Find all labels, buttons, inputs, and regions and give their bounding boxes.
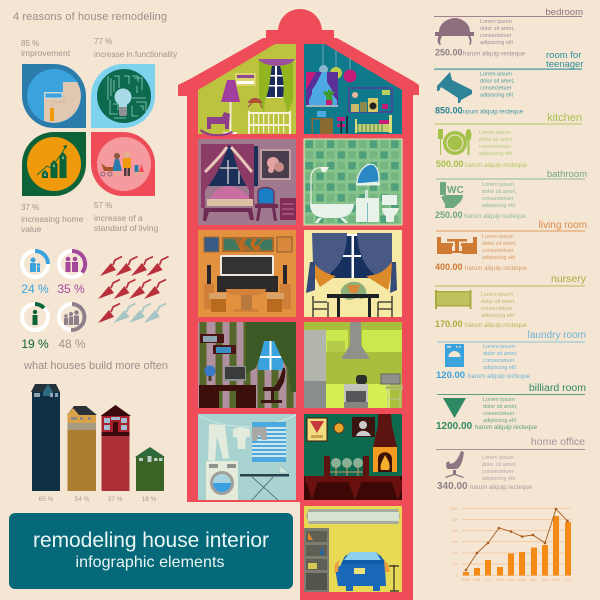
- bathroom mirror: [356, 164, 380, 186]
- sideboard: [217, 276, 278, 292]
- icon: office chair: [445, 451, 464, 478]
- bedroom chair: [255, 188, 278, 221]
- x axis labels: 2011: [530, 578, 537, 582]
- dining window: [330, 234, 380, 278]
- donut 19 percent: 19 %: [21, 337, 49, 351]
- room: kitchen: [304, 322, 402, 408]
- reason: improvement: 85 %: [21, 39, 39, 48]
- list: room for teenager: harum aliquip recteque: [461, 108, 524, 116]
- y axis labels: 300: [452, 540, 458, 544]
- list: laundry room: [436, 330, 586, 381]
- y axis labels: 1000: [450, 507, 458, 511]
- clothes line: [200, 415, 296, 426]
- room: bedroom: [198, 139, 296, 225]
- x axis labels: 2013: [552, 578, 560, 582]
- list: kitchen: kitchen: [547, 112, 582, 124]
- list: living room: living room: [539, 220, 587, 231]
- kitchen shelf: [327, 341, 345, 352]
- list: bedroom: dolor sit amet,: [480, 26, 515, 32]
- office desk: [199, 385, 256, 408]
- list: billiard room: billiard room: [529, 382, 586, 394]
- x axis labels: 2007: [484, 578, 492, 582]
- x axis labels: 2008: [496, 578, 503, 582]
- list: living room: Lorem ipsum: [482, 234, 514, 240]
- list: kitchen: [434, 112, 582, 169]
- list: kitchen: dolor sit amet,: [479, 137, 514, 143]
- office curtains: [246, 322, 296, 392]
- t-shirt: [233, 427, 250, 449]
- list: home office: dolor sit amet,: [482, 462, 517, 468]
- icon: toilet sign: [440, 182, 464, 208]
- list: billiard room: [436, 382, 586, 432]
- dining chairs: [313, 296, 392, 317]
- reason: home value: [21, 132, 86, 234]
- title banner: infographic elements: [76, 554, 224, 571]
- blue curtains: [312, 233, 392, 277]
- list: billiard room: adipiscing elit: [483, 418, 516, 424]
- trowel pictogram: [98, 256, 168, 323]
- list: laundry room: laundry room: [528, 330, 586, 341]
- icon: plate and cutlery: [438, 129, 472, 155]
- list: kitchen: consectetuer: [479, 144, 511, 150]
- bar house 65 percent: 65 %: [39, 496, 54, 503]
- chart: house bars: [31, 384, 165, 503]
- reason: functionality: [91, 37, 177, 128]
- y axis labels: 200: [452, 551, 458, 555]
- reason: home value: $: [62, 155, 65, 160]
- title banner: remodeling house interior: [33, 529, 269, 552]
- room: living room: [198, 230, 296, 317]
- shorts: [252, 427, 267, 441]
- list: room for teenager: teenager: [546, 59, 584, 70]
- bathtub: [310, 204, 354, 223]
- wall art: [204, 237, 292, 252]
- ironing board: [240, 465, 289, 500]
- list: bathroom: dolor sit amet,: [482, 189, 517, 195]
- y axis labels: 0: [456, 574, 458, 578]
- list: room for teenager: Lorem ipsum: [480, 72, 512, 78]
- list: home office: [436, 436, 585, 492]
- pot: [356, 375, 367, 384]
- reason: home value: increasing home: [21, 214, 84, 224]
- list: nursery: consectetuer: [481, 306, 513, 312]
- heading: 4 reasons: 4 reasons of house remodeling: [13, 11, 167, 23]
- jack stand: [389, 565, 399, 591]
- room: home office: [198, 322, 296, 408]
- vanity: [356, 190, 379, 222]
- striped towel: [252, 422, 286, 462]
- rocking horse: [200, 112, 233, 136]
- wall shelf: [235, 73, 256, 86]
- computer monitor: [224, 366, 246, 381]
- stove: [344, 384, 368, 408]
- toilet: [382, 195, 399, 222]
- room: billiard: [304, 414, 402, 500]
- crib: [248, 111, 291, 134]
- icon: toilet sign: WC: [447, 185, 464, 196]
- list: bedroom: bedroom: [546, 7, 583, 18]
- list: bathroom: harum aliquip recteque: [464, 213, 527, 220]
- chimney: [373, 414, 397, 447]
- panel: four reasons: [21, 37, 177, 234]
- list: billiard room: harum aliquip recteque: [475, 424, 538, 431]
- list: bedroom: harum aliquip recteque: [463, 50, 526, 58]
- floor lamp: [221, 80, 240, 134]
- list: nursery: nursery: [551, 273, 587, 285]
- reason: home value: $: [53, 163, 56, 168]
- framed poster: [307, 418, 327, 441]
- list: living room: adipiscing elit: [482, 255, 515, 261]
- list: kitchen: Lorem ipsum: [479, 130, 511, 136]
- icon: bed: [437, 72, 472, 103]
- list: living room: dolor sit amet,: [482, 241, 517, 247]
- list: bedroom: 250.00: [435, 48, 463, 58]
- list: room for teenager: 850.00: [435, 106, 463, 116]
- donut 35 percent: 35 %: [57, 282, 85, 296]
- x axis labels: 2006: [473, 578, 480, 582]
- list: kitchen: adipiscing elit: [479, 151, 512, 157]
- house outline: [178, 9, 419, 600]
- reason: standard of living: standard of living: [94, 223, 159, 233]
- list: bathroom: 250.00: [435, 210, 463, 220]
- icon: headboard: [435, 18, 474, 45]
- trend line: [465, 508, 569, 571]
- x axis labels: 2014: [564, 578, 571, 582]
- list: room for teenager: room for: [546, 50, 581, 61]
- washing machine: [206, 461, 238, 500]
- orange swags: [312, 262, 392, 290]
- list: home office: consectetuer: [482, 469, 514, 475]
- stool: [386, 386, 402, 408]
- list: room for teenager: [434, 50, 584, 116]
- list: home office: home office: [531, 436, 585, 448]
- x axis labels: [462, 578, 571, 582]
- list: laundry room: dolor sit amet,: [483, 351, 518, 357]
- x axis labels: 2012: [541, 578, 549, 582]
- list: laundry room: 120.00: [436, 370, 465, 381]
- garage door: [306, 509, 400, 524]
- nursery window: [258, 59, 295, 113]
- list: room for teenager: consectetuer: [480, 86, 512, 92]
- wallpaper stripes: [203, 322, 290, 408]
- cooker hood: [341, 322, 370, 359]
- knight picture: [352, 417, 375, 437]
- y axis labels: [450, 507, 458, 578]
- y axis labels: 400: [452, 529, 458, 533]
- trousers: [208, 424, 229, 461]
- list: nursery: adipiscing elit: [481, 313, 514, 319]
- list: nursery: Lorem ipsum: [481, 292, 513, 298]
- reason: improvement: [21, 39, 86, 128]
- side panels: [204, 284, 291, 309]
- fireplace: [373, 447, 397, 472]
- teen window: [306, 72, 338, 107]
- icon: billiard triangle: [443, 398, 466, 418]
- list: living room: [435, 220, 587, 272]
- list: bedroom: consectetuer: [480, 33, 512, 39]
- reason: standard of living: [91, 132, 159, 233]
- bars: [463, 516, 571, 576]
- garage shelves: [304, 528, 329, 592]
- list: bathroom: adipiscing elit: [482, 203, 515, 209]
- bar house 37 percent: 37 %: [108, 496, 123, 503]
- icon: washing machine: [445, 344, 464, 367]
- x axis labels: 2010: [518, 578, 526, 582]
- dining table: [327, 294, 379, 317]
- list: billiard room: dolor sit amet,: [483, 404, 518, 410]
- bedroom window: [201, 144, 258, 208]
- room: dining room: [304, 230, 402, 317]
- plant: [341, 282, 366, 300]
- reason: home value: $: [44, 172, 47, 177]
- donut stats: [21, 251, 86, 351]
- billiard table: [304, 476, 402, 500]
- list: bathroom: [435, 169, 587, 220]
- list: bathroom: Lorem ipsum: [482, 182, 514, 188]
- list: bathroom: consectetuer: [482, 196, 514, 202]
- list: room for teenager: dolor sit amet,: [480, 78, 515, 84]
- chart grid: [462, 508, 571, 576]
- room: bathroom: [304, 139, 402, 225]
- list: kitchen: harum aliquip recteque: [465, 162, 528, 169]
- list: bathroom: bathroom: [547, 169, 587, 180]
- reason: home value: value: [21, 224, 42, 234]
- hanging lamps: [319, 44, 356, 82]
- chart: bars with line: [450, 507, 571, 582]
- shower head: [320, 167, 329, 172]
- microwave: [381, 374, 400, 384]
- curtain ties: [306, 262, 397, 293]
- crib mobile: [248, 98, 262, 108]
- reason: standard of living: increase of a: [94, 213, 143, 223]
- list: laundry room: adipiscing elit: [483, 365, 516, 371]
- sofa: [324, 456, 369, 480]
- teen desk: [311, 111, 333, 134]
- list: living room: 400.00: [435, 262, 463, 272]
- list: laundry room: Lorem ipsum: [483, 344, 515, 350]
- donut 24 percent: 24 %: [21, 282, 49, 296]
- list: nursery: dolor sit amet,: [481, 299, 516, 305]
- list: living room: harum aliquip recteque: [465, 265, 528, 272]
- donut 48 percent: 48 %: [58, 337, 86, 351]
- list: nursery: 170.00: [435, 319, 463, 329]
- list: bedroom: adipiscing elit: [480, 40, 513, 46]
- y axis labels: 500: [452, 518, 458, 522]
- blue car: [334, 552, 390, 591]
- room: laundry: [198, 414, 296, 500]
- dining table and chairs: [209, 289, 284, 312]
- list: billiard room: Lorem ipsum: [483, 397, 515, 403]
- x axis labels: 2005: [462, 578, 469, 582]
- room: teenager: [304, 44, 402, 134]
- list: kitchen: 500.00: [436, 159, 464, 169]
- reason: improvement: improvement: [21, 48, 71, 58]
- lower cabinets: [326, 384, 390, 408]
- icon: table and chairs: [437, 237, 477, 254]
- room: garage: [304, 506, 402, 592]
- reason: functionality: increase in functionality: [94, 50, 177, 59]
- globe: [204, 366, 216, 381]
- speakers: [207, 265, 287, 284]
- teen bed: [355, 115, 392, 133]
- list: laundry room: harum aliquip recteque: [468, 373, 531, 380]
- list: nursery: [435, 273, 587, 329]
- list: home office: adipiscing elit: [482, 476, 515, 482]
- list: home office: Lorem ipsum: [482, 455, 514, 461]
- teen chair: [337, 116, 348, 133]
- list: bedroom: [434, 7, 583, 58]
- fridge: [304, 330, 326, 408]
- reason: standard of living: 57 %: [94, 201, 112, 210]
- bar house 18 percent: 18 %: [142, 496, 157, 503]
- room: nursery: [198, 44, 296, 136]
- bedroom dresser: [280, 198, 296, 220]
- heading: what houses build: what houses build more often: [23, 360, 168, 372]
- office window: [258, 340, 283, 370]
- bedroom picture: [260, 149, 291, 180]
- list: home office: 340.00: [437, 481, 468, 492]
- reason: home value: 37 %: [21, 203, 39, 212]
- title banner: [9, 513, 293, 589]
- y axis labels: 100: [452, 562, 458, 566]
- bar house 54 percent: 54 %: [75, 496, 90, 503]
- wall clock: [334, 423, 344, 433]
- shower: [311, 168, 322, 204]
- reason: functionality: 77 %: [94, 37, 112, 46]
- television: [220, 255, 274, 276]
- x axis labels: 2009: [507, 578, 515, 582]
- icon: crib: [435, 290, 472, 309]
- music shelf: [349, 88, 392, 112]
- upper cabinets: [326, 330, 402, 352]
- list: laundry room: consectetuer: [483, 358, 515, 364]
- bedroom bed: [203, 186, 254, 221]
- list: living room: consectetuer: [482, 248, 514, 254]
- book shelves: [200, 334, 236, 354]
- list: room for teenager: adipiscing elit: [480, 92, 513, 98]
- office chair: [261, 368, 285, 403]
- list: billiard room: consectetuer: [483, 411, 515, 417]
- list: nursery: harum aliquip recteque: [465, 322, 528, 329]
- list: home office: harum aliquip recteque: [470, 484, 533, 491]
- list: billiard room: 1200.00: [436, 421, 473, 432]
- list: bedroom: Lorem ipsum: [480, 19, 512, 25]
